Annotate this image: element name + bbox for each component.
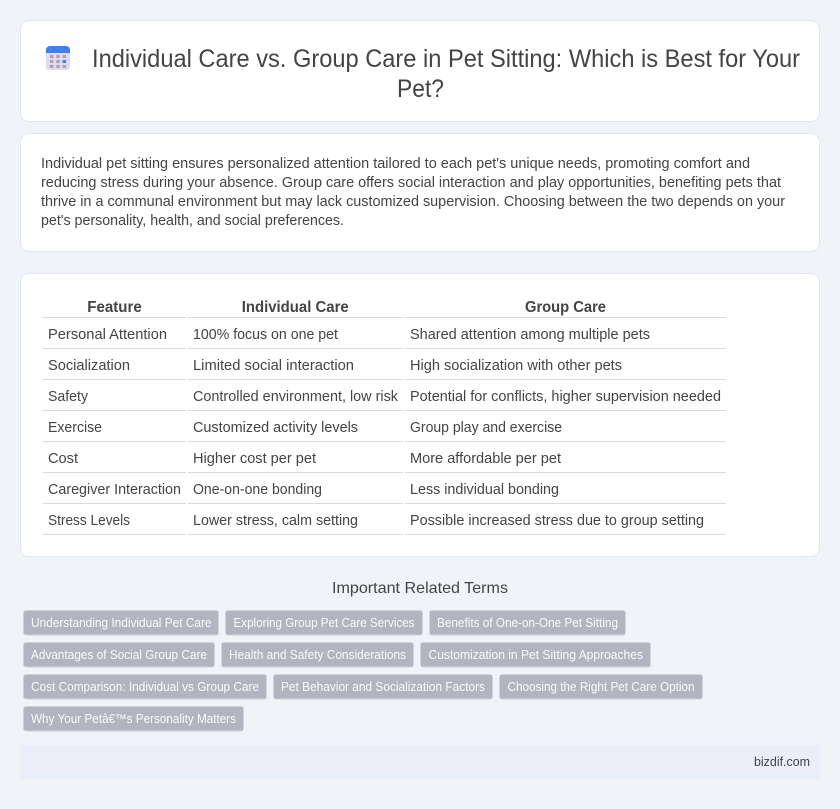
table rows: Limited social interaction: [193, 358, 354, 374]
heading: important related terms: Important Related Terms: [332, 580, 508, 597]
table header: Individual Care: [242, 299, 349, 316]
related term tags: Understanding Individual Pet Care: [31, 616, 212, 630]
related term tags: Customization in Pet Sitting Approaches: [428, 648, 643, 662]
table rows: Personal Attention: [48, 327, 167, 343]
panel: comparison table: [20, 274, 820, 556]
icon: calendar: [46, 46, 70, 70]
text block: introduction paragraph: reducing stress during your absence. Group care offers social interaction and play opportunities, benefiting pets that: [41, 175, 781, 191]
footer source: bizdif.com: [754, 755, 810, 769]
text block: introduction paragraph: Individual pet sitting ensures personalized attention tailored to each pet's unique needs, promoting comfort and: [41, 156, 750, 172]
related term tags: Health and Safety Considerations: [229, 648, 406, 662]
table header: Feature: [87, 299, 142, 316]
table rows: Caregiver Interaction: [48, 482, 181, 498]
text block: introduction paragraph: [41, 156, 785, 229]
table rows: Higher cost per pet: [193, 451, 316, 467]
related term tags: [24, 610, 702, 731]
panel: introduction: [20, 134, 820, 252]
table rows: High socialization with other pets: [410, 358, 622, 374]
table rows: More affordable per pet: [410, 451, 561, 467]
related term tags: Benefits of One-on-One Pet Sitting: [437, 616, 618, 630]
table rows: Shared attention among multiple pets: [410, 327, 650, 343]
table rows: Socialization: [48, 358, 130, 374]
related term tags: Pet Behavior and Socialization Factors: [281, 680, 485, 694]
title: [92, 45, 800, 103]
table rows: Group play and exercise: [410, 420, 562, 436]
table rows: Potential for conflicts, higher supervision needed: [410, 389, 721, 405]
table rows: Stress Levels: [48, 513, 130, 529]
footer: [20, 745, 820, 779]
table rows: 100% focus on one pet: [193, 327, 338, 343]
table rows: Customized activity levels: [193, 420, 358, 436]
related term tags: Exploring Group Pet Care Services: [234, 616, 414, 630]
table rows: Safety: [48, 389, 89, 405]
table rows: Cost: [48, 451, 78, 467]
table header: Group Care: [525, 299, 606, 316]
table rows: Exercise: [48, 420, 102, 436]
table rows: Lower stress, calm setting: [193, 513, 358, 529]
text block: introduction paragraph: thrive in a communal environment but may lack customized supervision. Choosing between the two depends on your: [41, 194, 785, 210]
table rows: Possible increased stress due to group setting: [410, 513, 704, 529]
panel: title header: [20, 20, 820, 122]
table rows: One-on-one bonding: [193, 482, 322, 498]
title: Individual Care vs. Group Care in Pet Sitting: Which is Best for Your: [92, 45, 800, 73]
related term tags: Choosing the Right Pet Care Option: [508, 680, 695, 694]
table header: [87, 299, 606, 316]
table rows: Less individual bonding: [410, 482, 559, 498]
related term tags: Why Your Petâ€™s Personality Matters: [31, 712, 236, 726]
related term tags: Advantages of Social Group Care: [31, 648, 207, 662]
title: Pet?: [397, 75, 444, 103]
table rows: Controlled environment, low risk: [193, 389, 399, 405]
table rows: [48, 327, 721, 529]
text block: introduction paragraph: pet's personality, health, and social preferences.: [41, 213, 344, 229]
related term tags: Cost Comparison: Individual vs Group Care: [31, 680, 259, 694]
